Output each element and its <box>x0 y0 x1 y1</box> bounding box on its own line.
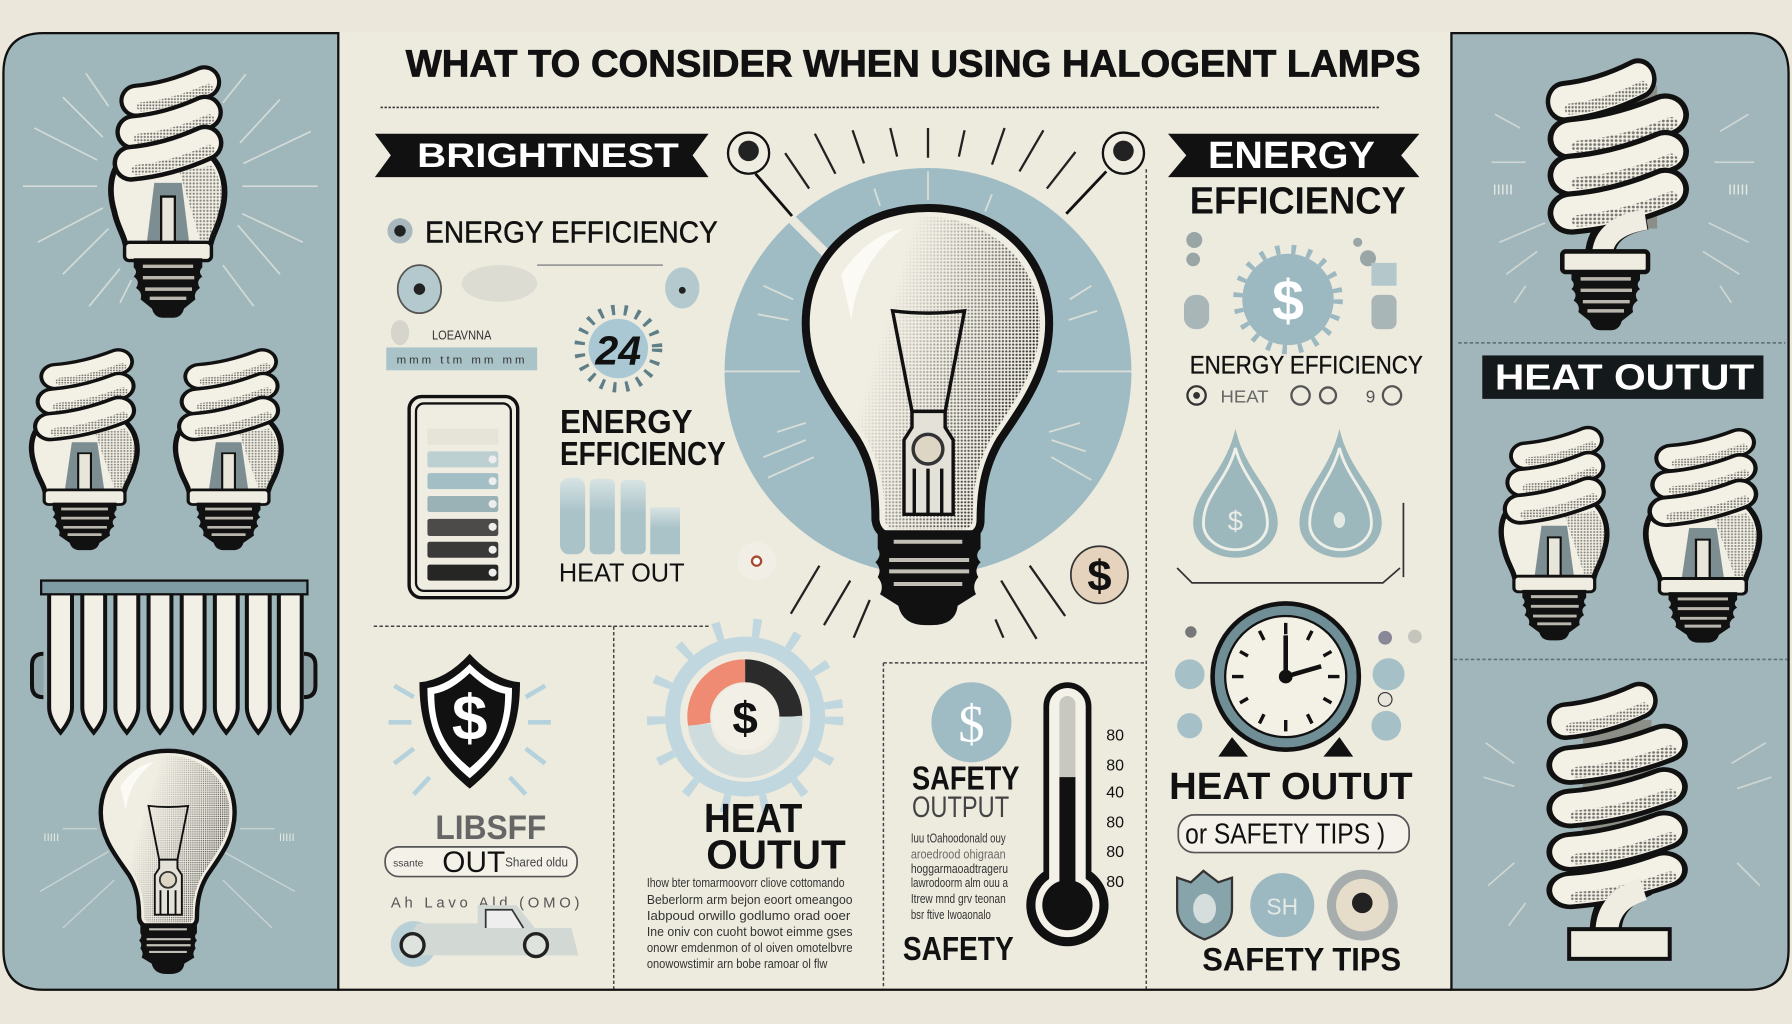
side label right: IIIII <box>279 832 295 844</box>
icon: shield: $ <box>452 681 488 753</box>
pill label: OUT <box>442 846 505 879</box>
icon: spiral bulb 3 <box>175 362 281 550</box>
panel: heat output gauge <box>647 627 853 971</box>
icon: dollar circle: $ <box>958 696 985 754</box>
small icons <box>1186 232 1376 266</box>
paragraph: bsr ftive Iwoaonalo <box>911 908 991 922</box>
outer rays <box>785 128 1075 639</box>
paragraph: lawrodoorm alm ouu a <box>911 876 1008 890</box>
heading: output: OUTUT <box>706 832 846 878</box>
ribbon: energy: ENERGY <box>1208 134 1375 176</box>
pill label: ssante <box>393 858 424 869</box>
icon: dollar circle <box>931 682 1011 762</box>
small drop <box>391 320 409 345</box>
divider: right panel upper <box>1458 342 1785 344</box>
small label: LOEAVNNA <box>432 328 492 342</box>
icon row <box>398 265 699 313</box>
rays around shield <box>389 686 551 794</box>
badge: top left <box>728 133 769 174</box>
icon: large light bulb <box>806 208 1049 625</box>
heading: energy efficiency small: ENERGY EFFICIENCY <box>1190 352 1423 380</box>
label bar <box>386 347 537 370</box>
icon: small indicator <box>387 218 413 243</box>
paragraph: hoggarmaoadtrageru <box>911 862 1008 876</box>
panel: energy efficiency column <box>1168 134 1423 583</box>
panel: left bulbs <box>3 33 338 990</box>
label: heat out: HEAT OUT <box>559 558 685 588</box>
paragraph: Ihow bter tomarmoovorr cliove cottomando <box>647 876 845 890</box>
icon: drop left <box>1193 429 1278 558</box>
bar chart <box>560 478 680 554</box>
inner rays <box>725 171 1131 480</box>
central illustration <box>725 128 1144 639</box>
label: lifespan: LIBSFF <box>435 809 546 847</box>
paragraph <box>647 876 853 971</box>
paragraph: Ine oniv con cuoht bowot eimme gses <box>647 925 853 939</box>
connector: right badge <box>1066 171 1106 214</box>
icon: drop left: $ <box>1228 505 1243 536</box>
side label left: IIIII <box>43 832 59 844</box>
connector: left badge <box>755 174 792 216</box>
icon: thermometer <box>1026 704 1109 946</box>
scale numbers: 80 <box>1106 757 1124 774</box>
icon: spiral bulb right 2 <box>1646 442 1759 643</box>
icon: dollar gear <box>1238 249 1338 350</box>
rays: bottom right bulb <box>1483 743 1771 926</box>
panel: clock and safety tips <box>1169 601 1422 977</box>
scale numbers: 80 <box>1106 844 1124 861</box>
paragraph: onowr emdenmon of ol oiven omotelbvre <box>647 941 853 955</box>
paragraph <box>911 831 1008 922</box>
rays: lower left bulb <box>40 829 295 928</box>
paragraph: Iabpoud orwillo godlumo orad ooer <box>647 909 850 923</box>
label: heat output: HEAT OUTUT <box>1495 357 1754 398</box>
pill label: Shared oldu <box>505 855 568 869</box>
ribbon: brightnest: BRIGHTNEST <box>417 137 679 175</box>
panel: centre content <box>338 32 1451 990</box>
pill label <box>385 846 577 879</box>
icon: shield <box>419 654 520 789</box>
badge: dollar: $ <box>1087 553 1111 601</box>
icon: top right spiral bulb <box>1562 79 1671 330</box>
rays: top right bulb <box>1491 114 1754 303</box>
paragraph: Iuu tOahoodonald ouy <box>911 831 1006 845</box>
blue sunburst circle <box>725 168 1131 575</box>
heading line 2: EFFICIENCY <box>560 436 726 473</box>
subheading: output: OUTPUT <box>912 791 1009 824</box>
icon: top left spiral bulb <box>111 82 225 318</box>
paragraph: aroedrood ohigraan <box>911 847 1006 861</box>
divider: title rule <box>381 106 1381 108</box>
scale numbers: 80 <box>1106 874 1124 891</box>
ribbon: energy <box>1168 134 1419 177</box>
panel: safety thermometer <box>903 682 1124 968</box>
side pills <box>1184 263 1397 329</box>
ribbon: brightnest <box>375 134 709 177</box>
heading: safety lower: SAFETY <box>903 931 1014 968</box>
badge: bottom left <box>737 542 776 581</box>
icon: 24 hour gear: 24 <box>594 328 641 374</box>
icon: heat gauge: $ <box>732 693 758 744</box>
icon: tips circle: SH <box>1266 893 1298 919</box>
scale numbers: 40 <box>1106 785 1124 802</box>
icon: spiral bulb 2 <box>31 362 137 550</box>
heading: heat: HEAT <box>704 795 802 841</box>
icon: phone with level bars <box>409 397 518 598</box>
icon: clock <box>1210 601 1361 757</box>
icon: dollar gear: $ <box>1272 269 1304 333</box>
heading: safety tips: SAFETY TIPS <box>1202 941 1401 977</box>
side label left top: IIIII <box>1493 182 1513 198</box>
icon and label row: 9 <box>1366 386 1375 406</box>
icon: heat gauge <box>656 627 834 806</box>
paragraph: onowowstimir arn bobe ramoar ol flw <box>647 957 828 971</box>
block: brightness details <box>386 214 718 370</box>
icon: 24 hour gear <box>579 310 657 387</box>
panel: right bulbs <box>1451 33 1789 990</box>
icon: bottom right spiral bulb <box>1565 701 1670 959</box>
dashed section borders <box>374 169 1146 990</box>
icon: radiator <box>32 581 315 733</box>
text block: energy efficiency with chart <box>559 404 726 588</box>
glow wedge <box>792 219 826 254</box>
heading: heat output: HEAT OUTUT <box>1169 765 1413 807</box>
scale numbers <box>1106 728 1124 891</box>
icon: pickup truck <box>391 905 578 967</box>
bottom frame line <box>338 989 1451 991</box>
badge: dollar <box>1071 546 1128 603</box>
icon: target circle <box>1327 870 1398 941</box>
icon: small shield <box>1177 871 1232 939</box>
heading: safety: SAFETY <box>912 761 1019 798</box>
heading: efficiency: EFFICIENCY <box>1190 180 1406 222</box>
title: WHAT TO CONSIDER WHEN USING HALOGENT LAMPS <box>406 43 1421 85</box>
icon and label row: HEAT <box>1221 386 1269 406</box>
side label right top: IIIII <box>1728 182 1749 198</box>
paragraph: Itrew mnd grv teonan <box>911 892 1006 906</box>
divider: right panel lower <box>1454 658 1787 660</box>
icon: spiral bulb right 1 <box>1501 440 1607 640</box>
panel: lifespan shield <box>385 654 579 967</box>
bracket <box>1177 503 1403 583</box>
small caption row: Ah Lavo Ald (OMO) <box>391 895 579 911</box>
heading: energy efficiency: ENERGY EFFICIENCY <box>425 214 718 249</box>
rays: top left bulb <box>23 73 318 306</box>
pill: safety tips: or SAFETY TIPS ) <box>1185 818 1385 850</box>
small icons around clock <box>1175 626 1422 741</box>
icon and label row <box>1187 386 1401 406</box>
heading: ENERGY <box>560 404 693 441</box>
badge: top right <box>1103 133 1144 174</box>
scale numbers: 80 <box>1106 728 1124 745</box>
icon: tips circle <box>1250 873 1314 937</box>
icon: lower left bulb <box>101 751 235 974</box>
scale numbers: 80 <box>1106 814 1124 831</box>
paragraph: Beberlorm arm bejon eoort omeangoo <box>647 893 853 907</box>
label bar: mmm ttm mm mm <box>397 354 525 366</box>
icon: drop right <box>1299 429 1382 558</box>
